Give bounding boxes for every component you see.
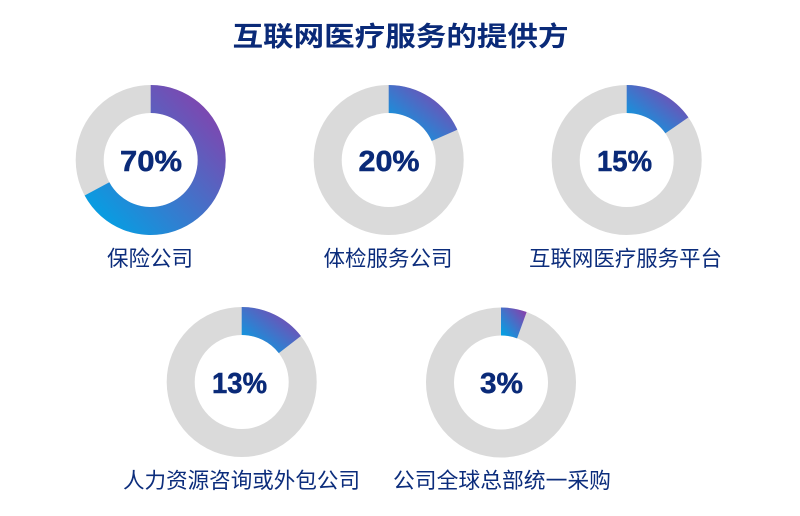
donut track: 70% <box>90 99 212 221</box>
donut segment: 15% <box>627 85 688 133</box>
title: 互联网医疗服务的提供方 <box>232 21 568 52</box>
label: 人力资源咨询或外包公司: 人力资源咨询或外包公司 <box>123 469 360 493</box>
value: 70%: 70% <box>120 146 182 178</box>
value: 15%: 15% <box>597 146 652 178</box>
label: 公司全球总部统一采购: 公司全球总部统一采购 <box>393 469 611 493</box>
panel: HR consulting or outsourcing companies 13% <box>123 307 360 493</box>
panel: insurance companies 70% <box>85 85 226 271</box>
donut track: 3% <box>440 322 562 444</box>
donut track: 20% <box>328 99 450 221</box>
panel: global HQ unified procurement 3% <box>393 308 611 493</box>
panel: health check companies 20% <box>324 85 457 271</box>
donut segment: 3% <box>501 308 527 338</box>
donut track: 13% <box>181 321 303 443</box>
label: 互联网医疗服务平台: 互联网医疗服务平台 <box>529 247 722 271</box>
panel: internet medical platforms 15% <box>529 85 722 271</box>
donut segment: 20% <box>389 85 457 141</box>
value: 3%: 3% <box>480 368 523 400</box>
donut segment: 70% <box>85 85 226 235</box>
value: 13%: 13% <box>212 368 267 400</box>
value: 20%: 20% <box>358 146 420 178</box>
label: 保险公司: 保险公司 <box>107 247 193 271</box>
donut track: 15% <box>566 99 688 221</box>
donut segment: 13% <box>242 307 301 353</box>
label: 体检服务公司: 体检服务公司 <box>324 247 452 271</box>
